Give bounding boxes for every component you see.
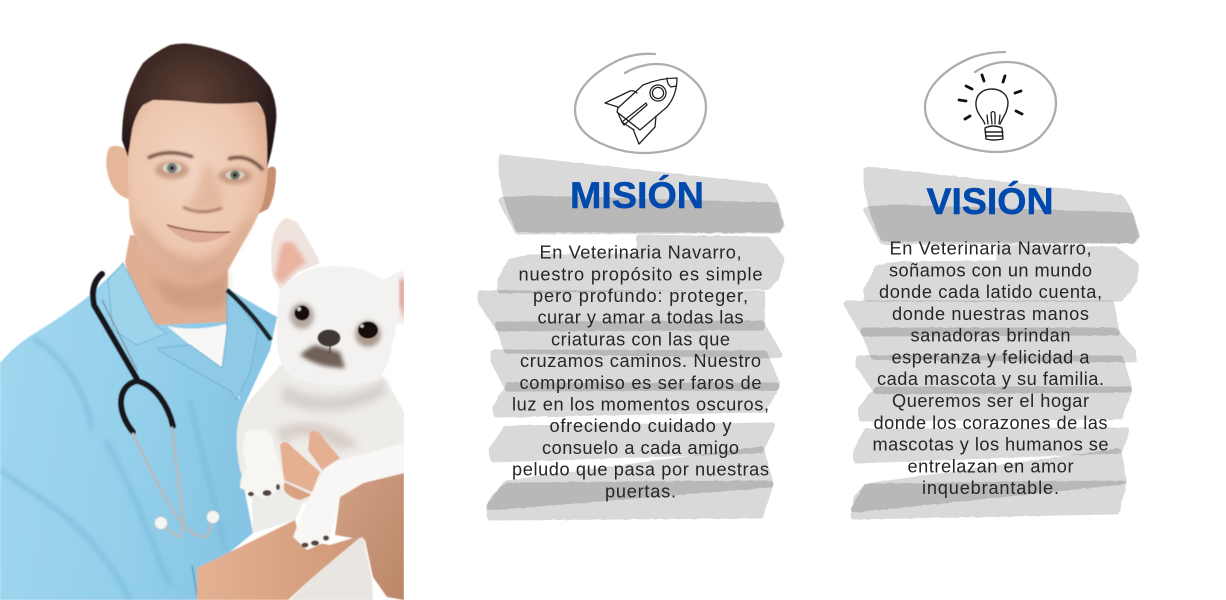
dog right ear inner: [400, 278, 404, 322]
brush strokes: visión: [847, 170, 1136, 516]
rocket body: [617, 78, 677, 130]
nose: [183, 165, 223, 212]
shoulder neck tube right: [227, 290, 271, 340]
forearm: [197, 520, 363, 600]
bulb glass: [976, 89, 1008, 124]
stethoscope metal tubes: [133, 428, 213, 537]
text block: visión: donde nuestras manos: [892, 304, 1089, 324]
text block: visión: entrelazan en amor: [908, 456, 1074, 476]
text block: visión: En Veterinaria Navarro,: [890, 238, 1092, 258]
icon: light bulb: [959, 75, 1022, 140]
fingers under dog: [280, 431, 340, 500]
text block: misión: peludo que pasa por nuestras: [512, 460, 769, 480]
rocket right fin: [633, 116, 656, 144]
face: [128, 99, 268, 265]
dog ear left: [271, 218, 320, 290]
dog muzzle and nose: [300, 330, 345, 368]
veterinarian shirt: [0, 263, 277, 600]
sleeve band edge: [192, 566, 198, 600]
rocket base: [618, 113, 634, 130]
dog chest shadow: [275, 423, 360, 450]
dog head: [277, 266, 404, 386]
stethoscope tips: [155, 511, 219, 529]
mouth: [167, 225, 230, 243]
neck: [125, 235, 243, 325]
text block: visión: Queremos ser el hogar: [892, 391, 1089, 411]
hand right: [335, 472, 404, 600]
rocket window: [650, 85, 666, 101]
bulb base: [985, 126, 1003, 140]
hair: [122, 44, 276, 167]
text block: misión: cruzamos caminos. Nuestro: [520, 351, 761, 371]
photo: veterinarian holding white dog: [0, 44, 404, 600]
left collar: [108, 263, 167, 345]
text block: visión: sanadoras brindan: [910, 326, 1070, 346]
stethoscope black tube: [93, 274, 173, 432]
text block: misión: nuestro propósito es simple: [518, 264, 762, 284]
icon: rocket: [605, 78, 677, 144]
right collar and placket: [158, 288, 258, 400]
rocket bar: [622, 103, 647, 125]
heading: visión: VISIÓN: [926, 180, 1054, 222]
text block: misión: ofreciendo cuidado y: [550, 416, 732, 436]
text block: misión: [512, 243, 769, 501]
rays: [959, 75, 1022, 119]
dog front leg left: [240, 429, 285, 498]
text block: misión: pero profundo: proteger,: [533, 286, 748, 306]
dog under-chin shadow: [280, 380, 385, 411]
white t-shirt: [167, 324, 240, 400]
text block: visión: [872, 238, 1108, 498]
ring: misión icon: [575, 54, 706, 153]
text block: misión: En Veterinaria Navarro,: [540, 243, 742, 263]
right ear: [258, 166, 276, 214]
text block: visión: esperanza y felicidad a: [892, 347, 1090, 367]
filament: [987, 112, 1000, 124]
text block: misión: compromiso es ser faros de: [520, 373, 762, 393]
text block: misión: luz en los momentos oscuros,: [512, 394, 769, 414]
text block: misión: consuelo a cada amigo: [542, 438, 739, 458]
dog front leg right: [293, 443, 404, 550]
dog eyes: [290, 303, 381, 347]
stubble shading: [138, 223, 246, 274]
heading: misión: MISIÓN: [570, 174, 704, 216]
text block: visión: soñamos con un mundo: [889, 260, 1092, 280]
dog lower belly: [290, 537, 373, 600]
text block: misión: criaturas con las que: [551, 329, 730, 349]
neck shadow: [150, 270, 228, 309]
dog paw toes: [248, 484, 329, 547]
text block: visión: donde los corazones de las: [874, 413, 1108, 433]
eyebrows: [148, 153, 263, 170]
ring: visión icon: [925, 52, 1056, 152]
left ear: [106, 146, 129, 199]
rocket nose line: [667, 78, 676, 87]
brush strokes: misión: [481, 158, 781, 517]
eyes: [155, 161, 252, 184]
inner dog ear: [275, 242, 306, 284]
text block: visión: donde cada latido cuenta,: [879, 282, 1102, 302]
text block: visión: mascotas y los humanos se: [872, 435, 1108, 455]
rocket left fin: [605, 91, 637, 107]
dog body: [237, 360, 404, 533]
shirt fold shadows: [0, 338, 225, 600]
text block: visión: cada mascota y su familia.: [877, 369, 1104, 389]
text block: misión: puertas.: [605, 481, 676, 501]
text block: visión: inquebrantable.: [922, 478, 1059, 498]
text block: misión: curar y amar a todas las: [538, 308, 744, 328]
